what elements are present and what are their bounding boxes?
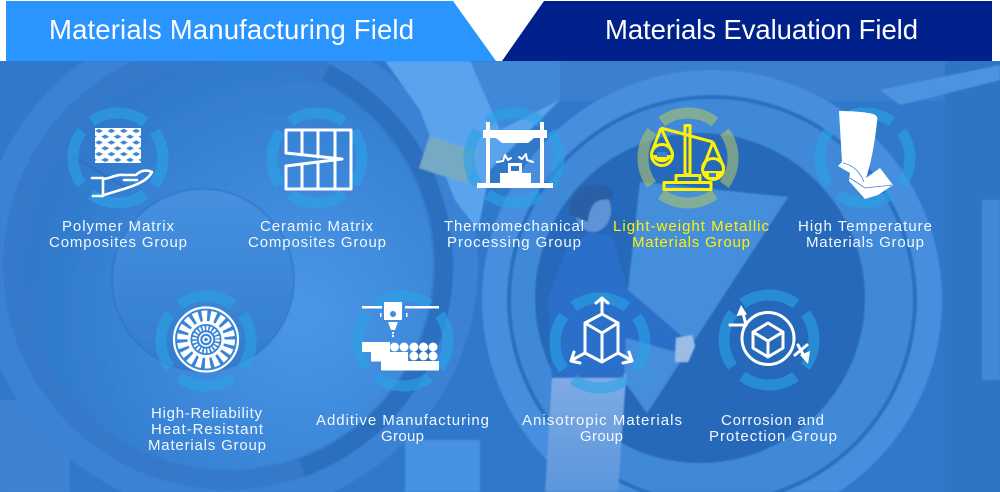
group: Additive Manufacturing xyxy=(316,296,489,445)
label: Processing Group xyxy=(447,234,581,251)
right header banner: Materials Evaluation Field: Materials Evaluation Field xyxy=(605,14,918,45)
right chamber xyxy=(482,70,942,492)
icon ring xyxy=(555,298,645,388)
icon: 3D printer head and powder bed xyxy=(362,302,439,370)
label xyxy=(522,412,682,445)
icon: turbine disc xyxy=(174,308,238,372)
group: Light-weight Metallic Materials (highlighted) xyxy=(613,113,770,251)
label: Light-weight Metallic xyxy=(613,218,770,235)
label: Heat-Resistant xyxy=(151,421,264,438)
label xyxy=(613,218,770,251)
group: Anisotropic Materials xyxy=(522,298,682,445)
label: Thermomechanical xyxy=(444,218,584,235)
group: Thermomechanical Processing xyxy=(444,113,584,251)
label xyxy=(316,412,489,445)
left header banner: Materials Manufacturing Field xyxy=(6,1,496,61)
icon: press xyxy=(477,122,553,188)
person xyxy=(545,374,626,492)
label xyxy=(798,218,932,251)
right header banner: Materials Evaluation Field xyxy=(502,1,992,61)
icon: cracked composite grid xyxy=(286,130,351,189)
group: Corrosion and Protection xyxy=(709,295,837,445)
label: Materials Group xyxy=(632,234,750,251)
icon ring xyxy=(73,113,163,203)
group: Polymer Matrix Composites xyxy=(49,113,187,251)
label xyxy=(709,412,837,445)
label xyxy=(444,218,584,251)
label: Materials Group xyxy=(806,234,924,251)
label: Composites Group xyxy=(49,234,187,251)
right background xyxy=(560,61,1000,101)
label: Group xyxy=(580,428,623,445)
label: Anisotropic Materials xyxy=(522,412,682,429)
label: High-Reliability xyxy=(151,405,262,422)
left header banner: Materials Manufacturing Field: Materials Manufacturing Field xyxy=(49,14,414,45)
label xyxy=(148,405,266,454)
icon: turbine blade xyxy=(838,111,893,199)
icon: woven fabric on hand xyxy=(92,128,152,196)
icon ring xyxy=(358,296,448,386)
icon ring xyxy=(724,295,814,385)
label xyxy=(49,218,187,251)
icon: balance scale xyxy=(652,126,724,190)
label: High Temperature xyxy=(798,218,932,235)
icon: cube with three axis arrows xyxy=(571,298,632,363)
icon ring xyxy=(161,296,251,386)
sheet xyxy=(622,182,788,413)
left door xyxy=(0,61,478,492)
label: Additive Manufacturing xyxy=(316,412,489,429)
group: High Temperature Materials xyxy=(798,111,932,251)
label: Materials Group xyxy=(148,437,266,454)
group: High-Reliability Heat-Resistant Materials xyxy=(148,296,266,454)
gap between chambers xyxy=(385,61,560,230)
label: Polymer Matrix xyxy=(62,218,174,235)
label xyxy=(248,218,386,251)
icon ring xyxy=(820,113,910,203)
icon: cube in circle with arrows xyxy=(730,305,810,364)
icon ring xyxy=(272,113,362,203)
label: Composites Group xyxy=(248,234,386,251)
label: Protection Group xyxy=(709,428,837,445)
label: Group xyxy=(381,428,424,445)
label: Ceramic Matrix xyxy=(260,218,374,235)
group: Ceramic Matrix Composites xyxy=(248,113,386,251)
label: Corrosion and xyxy=(721,412,824,429)
icon ring xyxy=(469,113,559,203)
icon ring xyxy=(643,113,733,203)
